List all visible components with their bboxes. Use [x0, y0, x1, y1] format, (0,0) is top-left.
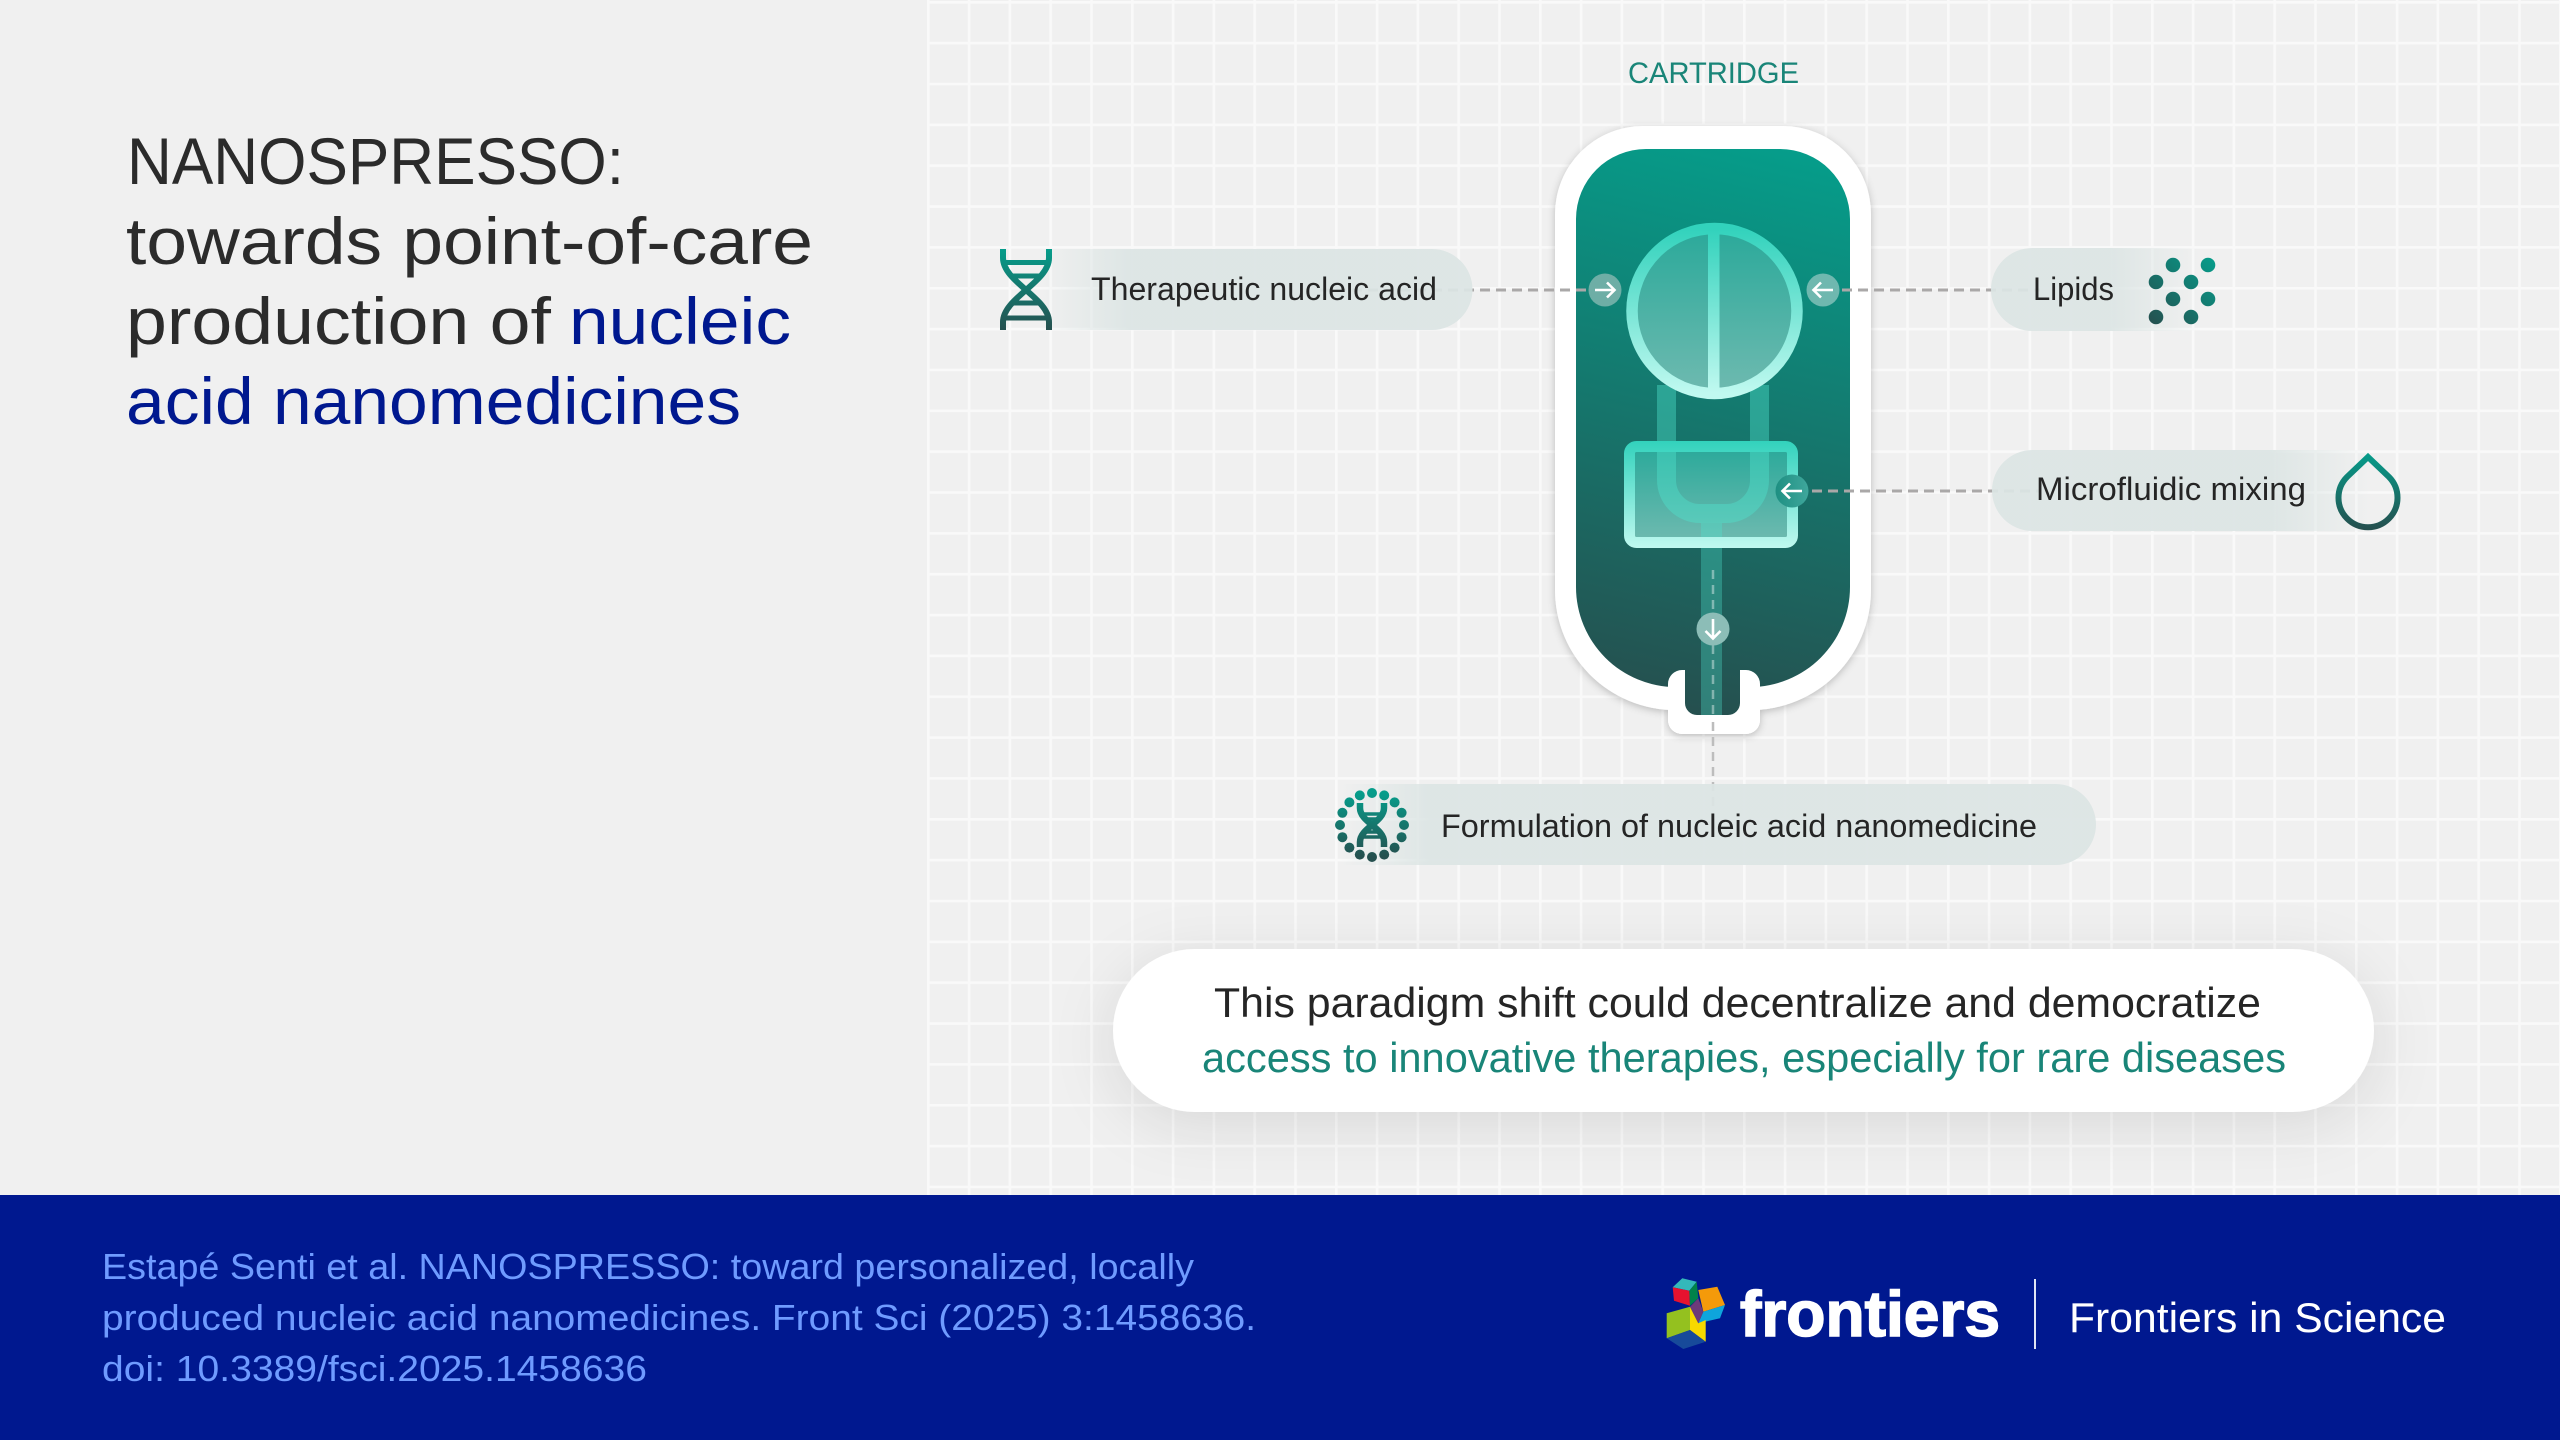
cartridge outlet notch — [1668, 670, 1760, 734]
arrow: outlet — [1696, 612, 1730, 646]
arrow: therapeutic nucleic acid input — [1588, 274, 1622, 306]
arrow: microfluidic mixing input — [1776, 474, 1808, 508]
arrow: lipids input — [1806, 274, 1840, 306]
label: therapeutic nucleic acid: Therapeutic nucleic acid — [1091, 271, 1437, 307]
icon: lipid dots — [2149, 258, 2215, 324]
fluid channels — [1666, 385, 1760, 716]
label: microfluidic mixing: Microfluidic mixing — [2036, 471, 2306, 507]
icon: droplet — [2338, 457, 2397, 527]
connector: dashed line from microfluidic mixing — [1812, 490, 2040, 492]
mixer chamber fill — [1630, 447, 1792, 542]
label: lipids: Lipids — [2033, 271, 2114, 307]
title: NANOSPRESSO: — [127, 124, 624, 198]
connector: dashed line from therapeutic nucleic acid — [1320, 288, 1590, 292]
callout — [1113, 949, 2374, 1112]
title: nucleic — [569, 284, 791, 358]
connector: dashed line from lipids — [1842, 288, 2040, 292]
citation — [102, 1246, 1256, 1389]
mixing circle chamber — [1632, 228, 1797, 394]
connector: dashed line to formulation — [1712, 722, 1714, 810]
label: therapeutic nucleic acid — [1003, 249, 1472, 330]
icon: frontiers cubes — [1667, 1278, 1725, 1349]
mixer chamber border — [1630, 446, 1792, 542]
label: formulation of nucleic acid nanomedicine: Formulation of nucleic acid nanomedicine — [1441, 808, 2037, 844]
citation: Estapé Senti et al. NANOSPRESSO: toward personalized, locally — [102, 1246, 1194, 1287]
cartridge white casing — [1555, 126, 1871, 734]
title — [126, 124, 813, 438]
title: towards point-of-care — [126, 204, 813, 278]
outlet dashed line inside cartridge — [1712, 570, 1714, 722]
cartridge — [1555, 126, 1871, 734]
title: acid nanomedicines — [126, 364, 741, 438]
frontiers logo: frontiers — [1740, 1278, 2000, 1350]
title: production of — [126, 284, 552, 358]
label: formulation of nucleic acid nanomedicine — [1335, 784, 2096, 865]
label: microfluidic mixing — [1992, 450, 2397, 531]
footer band — [0, 1195, 2560, 1440]
callout: access to innovative therapies, especially for rare diseases — [1202, 1034, 2286, 1081]
heading: cartridge: CARTRIDGE — [1628, 57, 1799, 90]
label: lipids — [1991, 248, 2215, 331]
citation: produced nucleic acid nanomedicines. Front Sci (2025) 3:1458636. — [102, 1297, 1256, 1338]
citation: doi: 10.3389/fsci.2025.1458636 — [102, 1348, 647, 1389]
logo divider — [2034, 1279, 2036, 1349]
callout: This paradigm shift could decentralize and democratize — [1214, 979, 2261, 1026]
icon: DNA in nanoparticle — [1335, 788, 1409, 862]
icon: DNA helix — [1003, 249, 1049, 330]
cartridge teal interior — [1576, 149, 1850, 716]
journal name: Frontiers in Science — [2069, 1294, 2446, 1341]
